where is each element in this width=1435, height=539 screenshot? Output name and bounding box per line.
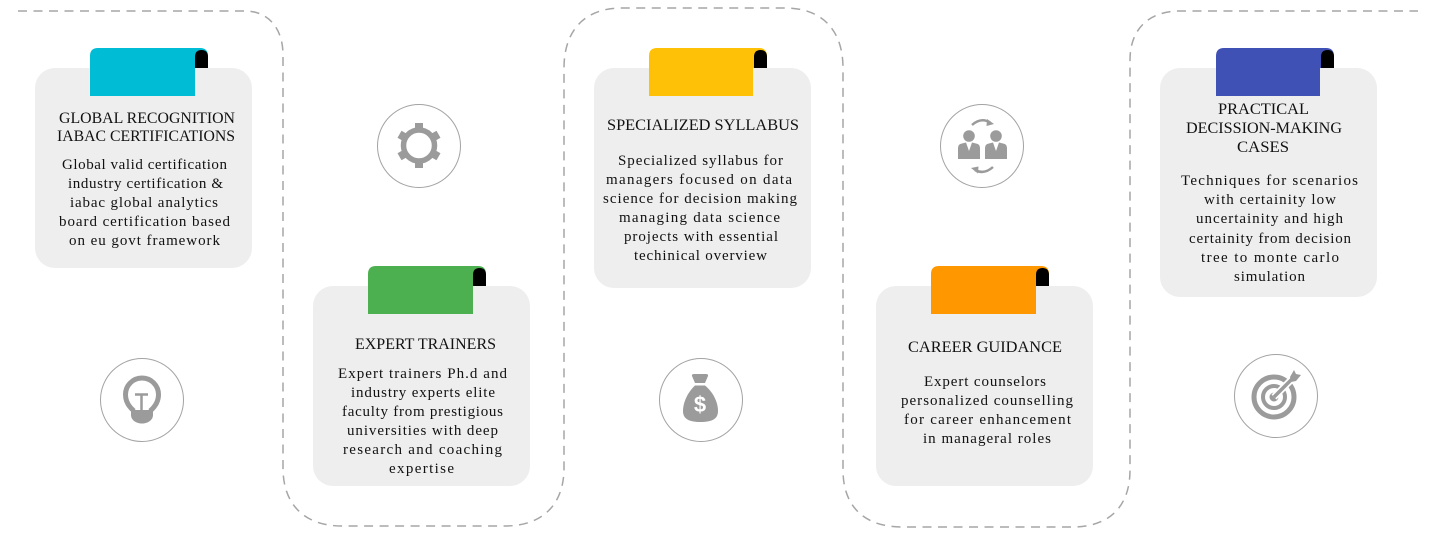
body text: research and coaching <box>343 442 502 458</box>
card background <box>876 286 1093 486</box>
tab: green ribbon <box>368 266 486 314</box>
body text: with certainity low <box>1204 192 1336 208</box>
card background <box>1160 68 1377 297</box>
body text: Expert trainers Ph.d and <box>338 366 508 382</box>
panel: practical decision-making cases <box>1160 48 1377 297</box>
body text: Expert counselors <box>924 374 1046 390</box>
body text: managers focused on data <box>606 172 792 188</box>
body text: on eu govt framework <box>69 233 220 249</box>
body text <box>59 157 230 249</box>
heading: EXPERT TRAINERS <box>355 336 496 353</box>
heading: CASES <box>1237 139 1289 156</box>
body text: industry certification & <box>68 176 223 192</box>
tab: yellow ribbon <box>649 48 767 96</box>
body text: projects with essential <box>624 229 778 245</box>
panel: specialized syllabus <box>594 48 811 288</box>
body text: board certification based <box>59 214 230 230</box>
icon: money bag <box>660 358 742 442</box>
body text: Specialized syllabus for <box>618 153 783 169</box>
tab: indigo ribbon <box>1216 48 1334 96</box>
body text: managing data science <box>619 210 780 226</box>
icon: money bag: $ <box>694 392 706 417</box>
body text: for career enhancement <box>904 412 1072 428</box>
body text <box>603 153 798 264</box>
body text: Techniques for scenarios <box>1181 173 1358 189</box>
body text: tree to monte carlo <box>1201 250 1339 266</box>
body text: personalized counselling <box>901 393 1074 409</box>
body text: Global valid certification <box>62 157 228 173</box>
icon: people exchange <box>940 104 1024 188</box>
body text: uncertainity and high <box>1196 211 1344 227</box>
body text: industry experts elite <box>351 385 495 401</box>
body text: faculty from prestigious <box>342 404 503 420</box>
body text: expertise <box>389 461 454 477</box>
body text: simulation <box>1234 269 1306 285</box>
icon: light bulb <box>100 358 184 442</box>
heading: GLOBAL RECOGNITION <box>59 110 235 127</box>
body text <box>338 366 508 477</box>
card background <box>313 286 530 486</box>
heading <box>57 110 235 145</box>
panel: global recognition <box>35 48 252 268</box>
body text: universities with deep <box>347 423 498 439</box>
icon: gear <box>378 104 460 188</box>
body text: iabac global analytics <box>70 195 218 211</box>
heading: CAREER GUIDANCE <box>908 339 1062 356</box>
tab: orange ribbon <box>931 266 1049 314</box>
card background <box>35 68 252 268</box>
card background <box>594 68 811 288</box>
body text: in manageral roles <box>923 431 1051 447</box>
body text: science for decision making <box>603 191 798 207</box>
heading: SPECIALIZED SYLLABUS <box>607 117 799 134</box>
heading: IABAC CERTIFICATIONS <box>57 128 235 145</box>
body text: techinical overview <box>634 248 767 264</box>
panel: career guidance <box>876 266 1093 486</box>
body text: certainity from decision <box>1189 231 1352 247</box>
heading: PRACTICAL <box>1218 101 1309 118</box>
body text <box>901 374 1074 447</box>
heading <box>1186 101 1342 156</box>
icon: target with arrow <box>1234 354 1318 438</box>
panel: expert trainers <box>313 266 530 486</box>
body text <box>1181 173 1358 285</box>
heading: DECISSION-MAKING <box>1186 120 1342 137</box>
tab: cyan ribbon <box>90 48 208 96</box>
